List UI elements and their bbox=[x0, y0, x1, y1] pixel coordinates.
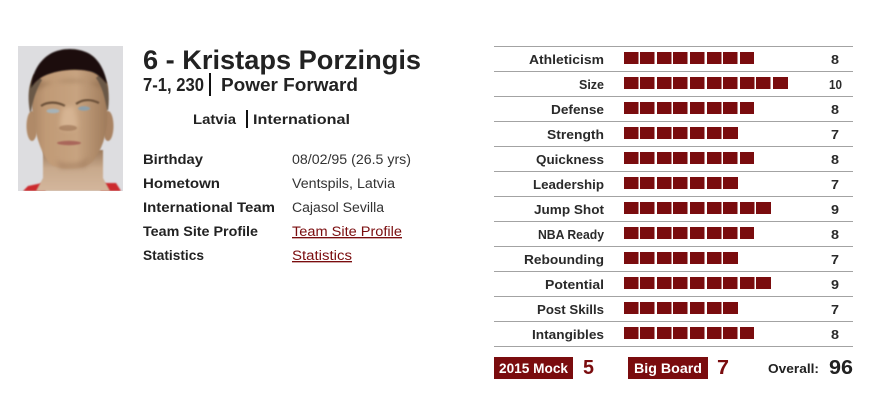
row: Strength: 7 bbox=[831, 127, 839, 142]
big board badge bbox=[628, 357, 708, 379]
ratings table bbox=[494, 46, 853, 346]
row: Athleticism: Athleticism bbox=[529, 53, 604, 67]
big board rank: 7 bbox=[717, 357, 729, 379]
bio table bbox=[143, 152, 411, 263]
row: Potential bbox=[545, 277, 839, 292]
row: Strength bbox=[547, 127, 839, 142]
forehead shadow bbox=[38, 78, 100, 90]
row: NBA Ready bbox=[538, 227, 839, 242]
bio table: 08/02/95 (26.5 yrs) bbox=[292, 152, 411, 167]
row: Defense bbox=[551, 102, 839, 117]
2015 mock badge bbox=[494, 357, 573, 379]
side hair bbox=[29, 72, 109, 112]
row: Jump Shot: 9 bbox=[831, 202, 839, 217]
row: Athleticism: 8 bbox=[831, 52, 839, 67]
row: Potential: 9 bbox=[831, 277, 839, 292]
row: NBA Ready: 8 bbox=[831, 227, 839, 242]
row: Potential: Potential bbox=[545, 278, 604, 292]
ears bbox=[26, 111, 38, 141]
face bbox=[30, 67, 108, 169]
player photo bbox=[18, 46, 123, 191]
overall score: 96 bbox=[829, 357, 853, 379]
row: Size: Size bbox=[579, 78, 604, 92]
bio table: Statistics bbox=[292, 248, 352, 263]
row: Strength: Strength bbox=[547, 128, 604, 142]
row: Post Skills bbox=[537, 302, 839, 317]
row: Post Skills: Post Skills bbox=[537, 303, 604, 317]
row: Size: 10 bbox=[829, 77, 842, 92]
row: Athleticism bbox=[529, 52, 839, 67]
row: Post Skills: 7 bbox=[831, 302, 839, 317]
row: Quickness bbox=[536, 152, 839, 167]
brows bbox=[41, 100, 99, 106]
position: Power Forward bbox=[221, 75, 358, 95]
bio table: Hometown bbox=[143, 176, 220, 191]
bio table: Statistics bbox=[143, 248, 204, 263]
bio table: Birthday bbox=[143, 152, 204, 167]
neck bbox=[36, 150, 110, 191]
player name: 6 - Kristaps Porzingis bbox=[143, 45, 421, 75]
row: Leadership: 7 bbox=[831, 177, 839, 192]
bio table: Team Site Profile bbox=[143, 224, 259, 239]
bio table: Cajasol Sevilla bbox=[292, 200, 385, 215]
row: Defense: Defense bbox=[551, 103, 604, 117]
overall label: Overall: bbox=[768, 361, 819, 376]
2015 mock badge: 2015 Mock bbox=[499, 360, 568, 376]
row: Leadership bbox=[533, 177, 839, 192]
bio table: International Team bbox=[143, 200, 275, 215]
row: Jump Shot bbox=[534, 202, 839, 217]
row: Intangibles: 8 bbox=[831, 327, 839, 342]
jersey bbox=[23, 183, 121, 191]
chin shadow bbox=[58, 160, 87, 170]
row: Intangibles: Intangibles bbox=[532, 328, 604, 342]
mouth bbox=[57, 141, 81, 145]
row: NBA Ready: NBA Ready bbox=[538, 228, 604, 242]
divider bbox=[209, 73, 211, 96]
nose bbox=[60, 106, 77, 130]
row: Size bbox=[579, 77, 842, 92]
row: Rebounding: Rebounding bbox=[524, 253, 604, 267]
row: Quickness: Quickness bbox=[536, 153, 604, 167]
bio table: Team Site Profile bbox=[292, 224, 402, 239]
bio table: Ventspils, Latvia bbox=[292, 176, 396, 191]
row: Defense: 8 bbox=[831, 102, 839, 117]
big board badge: Big Board bbox=[634, 360, 702, 376]
height and weight: 7-1, 230 bbox=[143, 75, 204, 95]
mock rank: 5 bbox=[583, 357, 594, 379]
eyes bbox=[46, 109, 60, 113]
row: Intangibles bbox=[532, 327, 839, 342]
row: Leadership: Leadership bbox=[533, 178, 604, 192]
league: International bbox=[253, 112, 350, 127]
row: Quickness: 8 bbox=[831, 152, 839, 167]
row: Jump Shot: Jump Shot bbox=[534, 203, 605, 217]
row: Rebounding: 7 bbox=[831, 252, 839, 267]
divider bbox=[246, 110, 248, 128]
hair bbox=[31, 49, 107, 88]
row: Rebounding bbox=[524, 252, 839, 267]
country: Latvia bbox=[193, 112, 237, 127]
